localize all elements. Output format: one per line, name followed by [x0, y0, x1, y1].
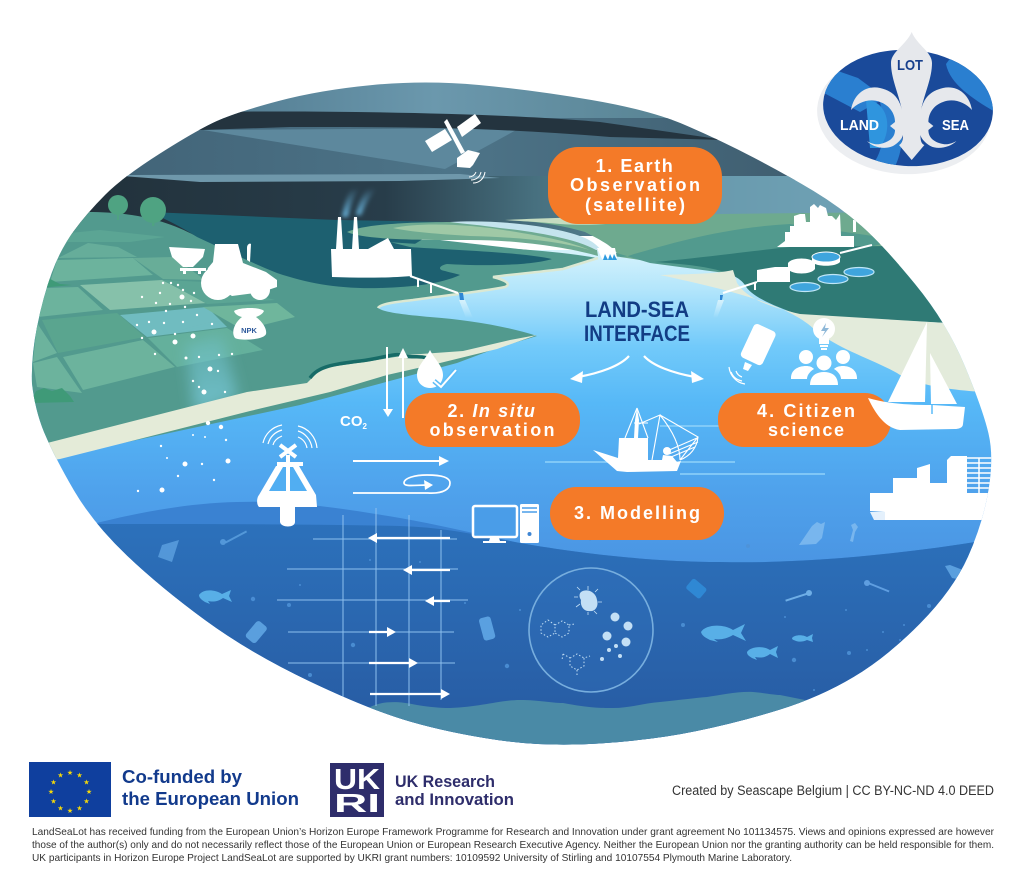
heading: land-sea interface [584, 297, 690, 346]
label pill: 2. In situ observation: 2. In situ [447, 401, 537, 421]
heading: land-sea interface: INTERFACE [584, 321, 690, 346]
funding disclaimer [32, 826, 994, 864]
icon: container ship [870, 456, 1000, 520]
plastic debris [158, 522, 968, 644]
icon: tractor with fertiliser spreader [169, 244, 277, 300]
logo: LandSeaLot: LOT [897, 57, 923, 74]
logo: EU flag: ★ [76, 772, 83, 780]
model current arrows [368, 533, 450, 699]
logo: EU flag: ★ [67, 769, 73, 777]
icon: NPK sack [233, 308, 266, 340]
farm fields [30, 230, 295, 403]
text: UK Research and Innovation: and Innovation [395, 791, 514, 809]
logo: EU flag: ★ [83, 798, 90, 806]
coastal vegetation [310, 355, 430, 378]
label pill: 1. Earth Observation (satellite): 1. Earth [596, 156, 674, 176]
logo fleur-de-lis [851, 32, 972, 160]
icon: water treatment plant [713, 245, 874, 318]
logo: EU flag: ★ [86, 788, 92, 796]
logo: LandSeaLot: SEA [942, 117, 969, 134]
logo: EU flag: ★ [57, 772, 64, 780]
text: co-funded by the European Union [122, 766, 299, 809]
label pill: 4. Citizen science [718, 393, 891, 447]
icon: NPK sack: NPK [241, 326, 257, 335]
label pill: 3. Modelling [550, 487, 724, 540]
credit line: Created by Seascape Belgium | CC BY-NC-ND 4.0 DEED [672, 783, 994, 798]
logo: EU flag: ★ [83, 778, 90, 786]
sediment seabed [369, 692, 806, 745]
text: UK Research and Innovation [395, 773, 514, 809]
funding disclaimer: LandSeaLot has received funding from the European Union’s Horizon Europe Framework Programme for Research and Innovation under grant agreement No 101134575. Views and opinions expressed are however [32, 826, 994, 838]
model grid [277, 508, 468, 706]
water [20, 250, 1000, 570]
label pill: 4. Citizen science: 4. Citizen [757, 401, 855, 421]
logo: EU flag: ★ [76, 804, 83, 812]
CO2 label: 2 [362, 422, 368, 431]
icon: sailboat [868, 322, 965, 430]
logo: EU flag: ★ [50, 778, 57, 786]
label pill: 1. Earth Observation (satellite): (satellite) [585, 195, 685, 215]
logo: UKRI [330, 763, 384, 818]
icon: city skyline [777, 204, 856, 247]
label pill: 3. Modelling: 3. Modelling [574, 503, 700, 523]
funding disclaimer: those of the author(s) only and do not necessarily reflect those of the European Union or European Research Executive Agency. Neither the European Union nor the granting authority can be held responsible for them. [32, 839, 994, 851]
logo: EU flag: ★ [67, 807, 73, 815]
icon: CO2 exchange arrows [383, 347, 408, 418]
direction arrows from land-sea interface [570, 356, 704, 383]
text: UK Research and Innovation: UK Research [395, 773, 495, 791]
icon: factory with smoke [331, 188, 473, 318]
logo: EU flag: ★ [50, 798, 57, 806]
nutrient dots [136, 282, 233, 492]
river [450, 221, 601, 250]
deep water [96, 502, 974, 745]
sea foam lines [545, 426, 825, 474]
icon: computer [473, 504, 539, 543]
shoreline [378, 258, 598, 308]
text: co-funded by the European Union: the European Union [122, 788, 299, 809]
hill bands [347, 222, 598, 261]
label pill: 1. Earth Observation (satellite): Observation [570, 175, 700, 195]
fertiliser run-off beam [185, 335, 238, 412]
sky [70, 82, 872, 236]
logo: UKRI: RI [334, 788, 380, 818]
logo: EU flag: ★ [48, 788, 54, 796]
icon: satellite [425, 114, 485, 183]
beach [20, 335, 537, 465]
heading: land-sea interface: LAND-SEA [585, 297, 689, 322]
icon: drifter bottle [729, 323, 777, 384]
logo: EU flag [29, 762, 111, 817]
funding disclaimer: UK participants in Horizon Europe Project LandSeaLot are supported by UKRI grant numbers: 10109592 University of Stirling and 10107554 Plymouth Marine Laboratory. [32, 852, 792, 864]
left land [20, 205, 597, 465]
text: co-funded by the European Union: Co-funded by [122, 766, 243, 787]
logo: EU flag: ★ [57, 804, 64, 812]
seawater particles [251, 539, 969, 691]
label pill: 4. Citizen science: science [768, 420, 844, 440]
CO2 label: CO [340, 413, 362, 430]
dark teal hills [150, 212, 552, 288]
trees [108, 195, 166, 226]
current arrows: surface flow [353, 456, 450, 493]
icon: fishing boat [593, 408, 698, 472]
icon: monitoring buoy [257, 425, 317, 526]
illustration: land-sea oval scene [20, 78, 1000, 760]
microscopic view circle [529, 568, 653, 692]
label pill: 2. In situ observation: observation [430, 420, 554, 440]
icon: water drop with check [417, 350, 456, 388]
waterfall [597, 248, 617, 260]
fish [199, 590, 813, 660]
label pill: 2. In situ observation [405, 393, 580, 447]
logo: UKRI: UK [334, 764, 380, 796]
right hills [505, 212, 1000, 395]
icon: citizen group with idea bulb [791, 318, 857, 385]
logo: LandSeaLot [813, 32, 997, 180]
logo: LandSeaLot: LAND [840, 117, 879, 134]
label pill: 1. Earth Observation (satellite) [548, 147, 722, 224]
